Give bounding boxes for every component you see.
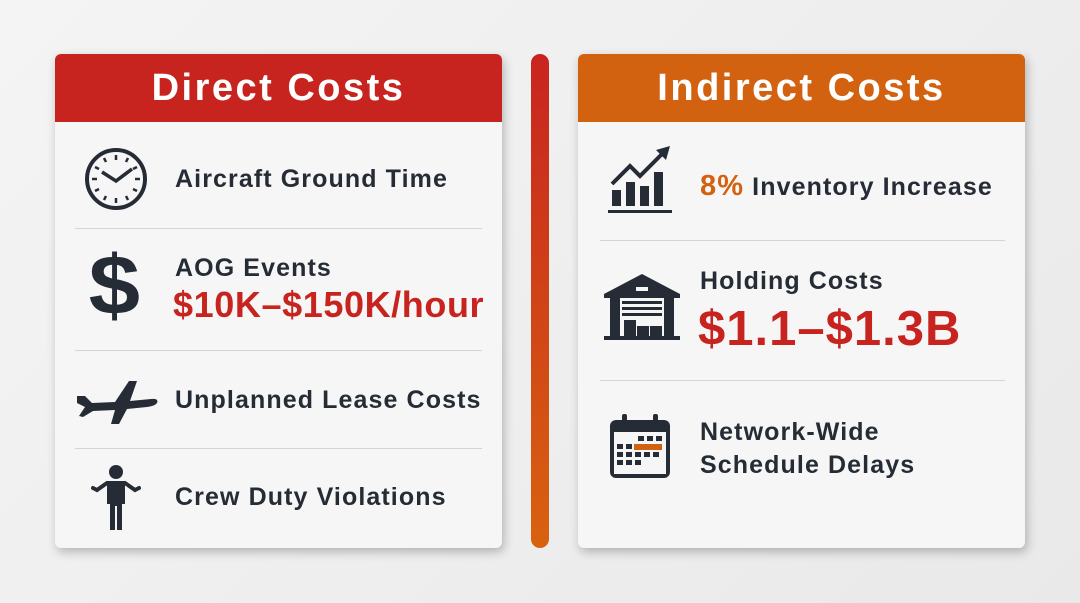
heading: direct costs xyxy=(55,54,502,122)
divider bar xyxy=(531,54,549,548)
icon: clock xyxy=(85,148,147,210)
heading: indirect costs xyxy=(578,54,1025,122)
text: unplanned lease costs: Unplanned Lease Costs xyxy=(175,386,482,414)
panel: indirect costs xyxy=(578,54,1025,548)
text: crew duty violations: Crew Duty Violations xyxy=(175,483,447,511)
text: network-wide schedule delays: Schedule Delays xyxy=(700,451,915,479)
text: network-wide schedule delays: Network-Wide xyxy=(700,418,880,446)
text: holding costs: Holding Costs xyxy=(700,267,884,295)
text: holding cost value: $1.1–$1.3B xyxy=(698,302,961,356)
icon: dollar: $ xyxy=(89,238,140,332)
icon: warehouse xyxy=(604,274,680,340)
heading: direct costs: Direct Costs xyxy=(152,67,405,109)
icon: growth chart xyxy=(608,146,672,213)
panel: direct costs xyxy=(55,54,502,548)
icon: airplane xyxy=(77,381,158,424)
icon: calendar xyxy=(610,414,670,478)
text: inventory increase: 8% Inventory Increase xyxy=(700,170,993,202)
text: AOG cost: $10K–$150K/hour xyxy=(173,284,484,325)
icon: person xyxy=(91,465,141,530)
text: aircraft ground time: Aircraft Ground Time xyxy=(175,165,448,193)
text: network-wide schedule delays xyxy=(700,418,915,479)
heading: indirect costs: Indirect Costs xyxy=(657,67,946,109)
text: AOG events: AOG Events xyxy=(175,254,332,282)
